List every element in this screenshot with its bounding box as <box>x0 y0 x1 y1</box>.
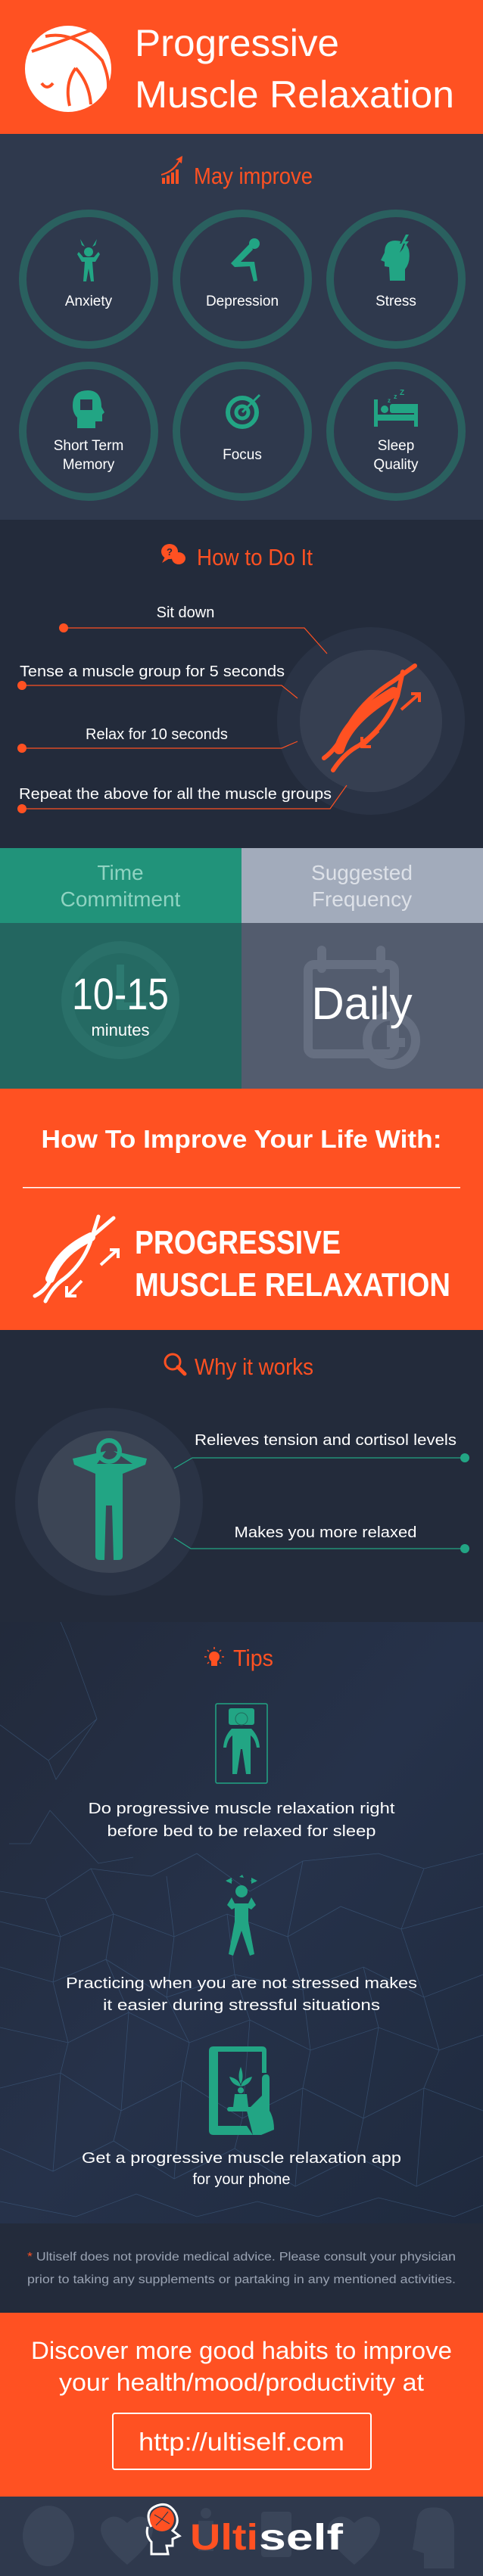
footer <box>0 2497 483 2576</box>
tip: app: for your phone <box>193 2171 290 2188</box>
value: 10-15 minutes: minutes <box>91 1021 150 1039</box>
step: repeat: Repeat the above for all the muscle groups <box>19 786 332 803</box>
logo: ultiself: Ulti <box>190 2518 258 2558</box>
item: anxiety <box>65 239 113 309</box>
icon: clock <box>61 941 179 1059</box>
item: anxiety: Anxiety <box>65 294 113 309</box>
tip: not stressed: Practicing when you are not stressed makes <box>66 1975 417 1992</box>
item: sleep quality: Z <box>400 389 404 397</box>
icon: muscle white <box>35 1217 118 1301</box>
heading: may improve: May improve <box>194 163 313 189</box>
step: repeat <box>17 785 347 813</box>
step: sit down <box>59 604 327 654</box>
banner: how to improve <box>0 1089 483 1330</box>
item: stress: Stress <box>375 294 416 309</box>
item: focus: Focus <box>223 447 262 463</box>
point: relieves tension <box>174 1432 469 1468</box>
button: url <box>113 2413 371 2469</box>
icon: header muscle logo <box>25 26 111 112</box>
item: sleep quality: Sleep <box>378 438 414 454</box>
item: sleep quality: z <box>388 397 391 404</box>
icon: relaxed person <box>15 1408 203 1596</box>
item: depression <box>206 238 279 309</box>
heading: how to do it: ? <box>167 546 173 558</box>
title: Progressive <box>135 22 339 64</box>
point: more relaxed <box>174 1524 469 1553</box>
button: url: http://ultiself.com <box>139 2428 344 2456</box>
tip: not stressed: it easier during stressful situations <box>103 1997 380 2014</box>
disclaimer <box>0 2223 483 2313</box>
item: focus <box>223 395 262 463</box>
tip: before bed: before bed to be relaxed for sleep <box>108 1823 375 1840</box>
point: more relaxed: Makes you more relaxed <box>235 1524 416 1541</box>
logo: ultiself: self <box>259 2518 344 2558</box>
panel: tips <box>0 1622 483 2223</box>
panel: time commitment: Time <box>97 861 144 884</box>
point: relieves tension: Relieves tension and cortisol levels <box>195 1432 457 1449</box>
item: sleep quality: z <box>394 393 397 400</box>
tip: app <box>82 2046 401 2188</box>
panel: time commitment: Commitment <box>61 887 181 911</box>
tip: not stressed <box>66 1875 417 2014</box>
logo: ultiself <box>147 2504 344 2558</box>
panel: why it works <box>0 1330 483 1622</box>
item: short term memory: Memory <box>63 457 115 473</box>
item: short term memory: Short Term <box>54 438 123 454</box>
step: tense <box>17 663 298 698</box>
panel: suggested frequency: Frequency <box>312 887 412 911</box>
header: Muscle Relaxation <box>135 73 454 116</box>
title: progressive muscle relaxation <box>135 1224 450 1304</box>
heading: how to do it: How to Do It <box>197 544 313 570</box>
tip: before bed <box>88 1704 395 1840</box>
header <box>0 0 483 134</box>
heading: why it works: Why it works <box>195 1353 313 1380</box>
disclaimer: prior to taking any supplements or partaking in any mentioned activities. <box>27 2273 456 2286</box>
tip: app: Get a progressive muscle relaxation app <box>82 2150 401 2167</box>
item: sleep quality <box>373 389 419 473</box>
step: tense: Tense a muscle group for 5 seconds <box>20 663 285 680</box>
tip: before bed: Do progressive muscle relaxation right <box>88 1801 395 1817</box>
title: progressive muscle relaxation: PROGRESSIVE <box>135 1224 341 1261</box>
panel: time commitment <box>0 848 242 1089</box>
value: 10-15 minutes: 10-15 <box>72 970 169 1019</box>
value: 10-15 minutes <box>72 970 169 1039</box>
step: relax <box>17 726 298 753</box>
item: short term memory <box>54 390 123 473</box>
icon: muscle circle <box>277 627 465 815</box>
value: daily: Daily <box>311 978 413 1029</box>
step: sit down: Sit down <box>157 604 214 621</box>
call to action: Discover more good habits to improve <box>31 2337 452 2364</box>
panel: suggested frequency: Suggested <box>311 861 413 884</box>
item: sleep quality: Quality <box>373 457 419 473</box>
disclaimer: * Ultiself does not provide medical advice. Please consult your physician <box>27 2251 456 2264</box>
item: depression: Depression <box>206 294 279 309</box>
banner: how to improve: How To Improve Your Life With: <box>41 1125 442 1153</box>
panel: how to do it <box>0 520 483 848</box>
icon: calendar <box>308 950 416 1064</box>
panel: may improve <box>0 134 483 520</box>
item: stress <box>375 233 416 309</box>
heading: tips: Tips <box>233 1645 273 1671</box>
call to action: your health/mood/productivity at <box>59 2369 424 2396</box>
step: relax: Relax for 10 seconds <box>86 726 228 743</box>
panel: suggested frequency <box>242 848 483 1089</box>
heading: tips <box>204 1645 273 1671</box>
heading: may improve <box>161 156 313 189</box>
call to action <box>0 2313 483 2497</box>
